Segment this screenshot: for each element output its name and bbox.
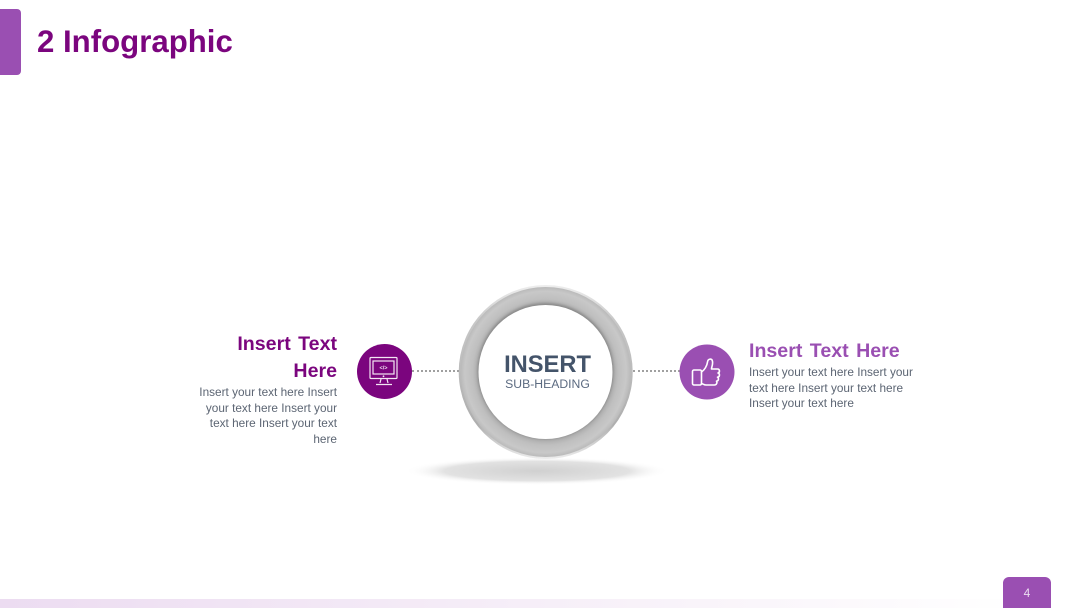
left heading: Here (293, 360, 337, 382)
title accent tab (0, 9, 21, 75)
left body text: here (313, 432, 337, 446)
outer ring (459, 285, 633, 459)
left heading: Insert Text (237, 333, 337, 355)
left body text: your text here Insert your (206, 401, 337, 415)
right body text (749, 365, 913, 410)
icon: computer monitor (357, 344, 412, 399)
center heading: INSERT (504, 352, 591, 378)
left body text: text here Insert your text (210, 416, 337, 430)
icon: computer monitor: </> (380, 366, 387, 372)
right body text: Insert your text here Insert your (749, 365, 913, 379)
icon: thumbs up (680, 344, 734, 400)
left text block (199, 333, 337, 446)
left heading (237, 333, 337, 382)
center subheading: SUB-HEADING (505, 377, 590, 391)
footer gradient bar (0, 599, 1080, 608)
right connector (633, 370, 680, 372)
right text block (749, 340, 913, 410)
page number badge (1003, 577, 1051, 608)
left body text (199, 385, 337, 446)
right body text: text here Insert your text here (749, 381, 903, 395)
left connector (412, 370, 459, 372)
central ring diagram (426, 285, 648, 483)
right heading: Insert Text Here (749, 340, 900, 362)
page number badge: 4 (1024, 586, 1030, 600)
right body text: Insert your text here (749, 396, 854, 410)
title: 2 Infographic (37, 24, 233, 59)
left body text: Insert your text here Insert (199, 385, 337, 399)
ground shadow (405, 457, 669, 485)
